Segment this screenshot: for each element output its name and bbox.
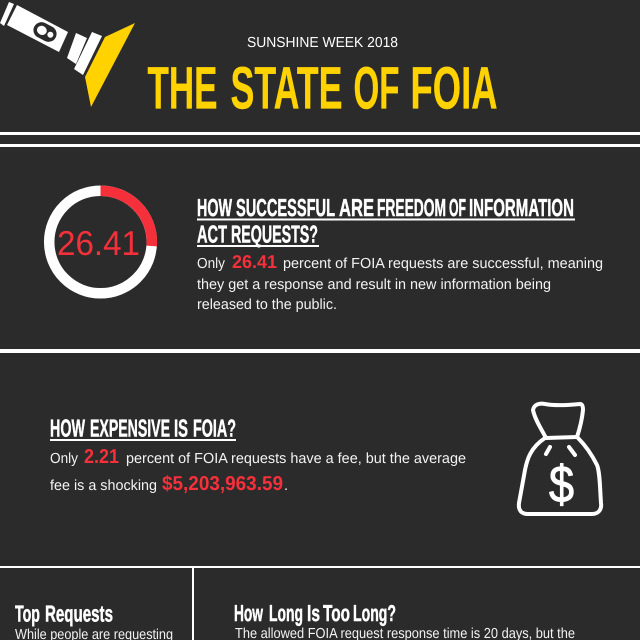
heading: how long: How xyxy=(234,600,263,626)
heading: how successful: ARE xyxy=(339,195,374,222)
text: cost description: fee is a shocking xyxy=(50,478,157,494)
heading: how successful: INFORMATION xyxy=(469,195,574,222)
heading: how successful xyxy=(197,195,575,248)
heading: how long: Long xyxy=(269,600,303,626)
chart: donut 26.41 percent xyxy=(49,191,152,293)
text: cost description: . xyxy=(284,478,288,494)
heading: top requests: Top xyxy=(15,600,40,626)
text: success description: they get a response and result in new information being xyxy=(197,277,551,293)
title: THE xyxy=(148,54,218,122)
panel: cost xyxy=(50,404,601,514)
heading: how successful: ACT xyxy=(197,222,227,248)
heading: how expensive: FOIA? xyxy=(193,416,236,442)
heading: how long xyxy=(234,600,396,626)
title: OF xyxy=(354,54,400,122)
text: cost description xyxy=(50,446,466,495)
title xyxy=(148,54,498,122)
chart: donut 26.41 percent: 26.41 xyxy=(57,225,140,263)
panel: how long xyxy=(234,600,575,640)
icon: flashlight xyxy=(0,2,135,107)
panel: top requests xyxy=(15,600,173,640)
text: cost description: percent of FOIA requests have a fee, but the average xyxy=(126,451,466,467)
heading: how long: Is xyxy=(307,600,320,626)
heading: how expensive: IS xyxy=(174,416,188,442)
heading: how successful: REQUESTS? xyxy=(231,222,318,248)
heading: how successful: SUCCESSFUL xyxy=(236,195,335,222)
panel: success rate xyxy=(49,191,603,313)
heading: how successful: HOW xyxy=(197,195,233,222)
text: cost description: Only xyxy=(50,451,79,467)
text: success description: released to the public. xyxy=(197,297,337,313)
heading: how successful: FREEDOM xyxy=(377,195,446,222)
text: success description: percent of FOIA requests are successful, meaning xyxy=(283,256,603,272)
heading: how expensive: EXPENSIVE xyxy=(90,416,170,442)
text: cost description: 2.21 xyxy=(84,446,119,468)
title: FOIA xyxy=(410,54,498,122)
heading: how long: Long? xyxy=(353,600,396,626)
icon: money bag: $ xyxy=(549,456,574,514)
heading: how long: Too xyxy=(323,600,350,626)
heading: top requests xyxy=(15,600,113,626)
heading: how successful: OF xyxy=(449,195,466,222)
heading: top requests: Requests xyxy=(45,600,113,626)
text: success description: 26.41 xyxy=(232,251,277,272)
heading: how expensive: HOW xyxy=(50,416,86,442)
text: success description: Only xyxy=(197,256,226,272)
title: STATE xyxy=(230,54,342,122)
icon: money bag xyxy=(519,404,601,514)
eyebrow: Sunshine Week 2018: SUNSHINE WEEK 2018 xyxy=(247,35,398,51)
text: success description xyxy=(197,251,603,313)
text: cost description: $5,203,963.59 xyxy=(162,473,283,495)
